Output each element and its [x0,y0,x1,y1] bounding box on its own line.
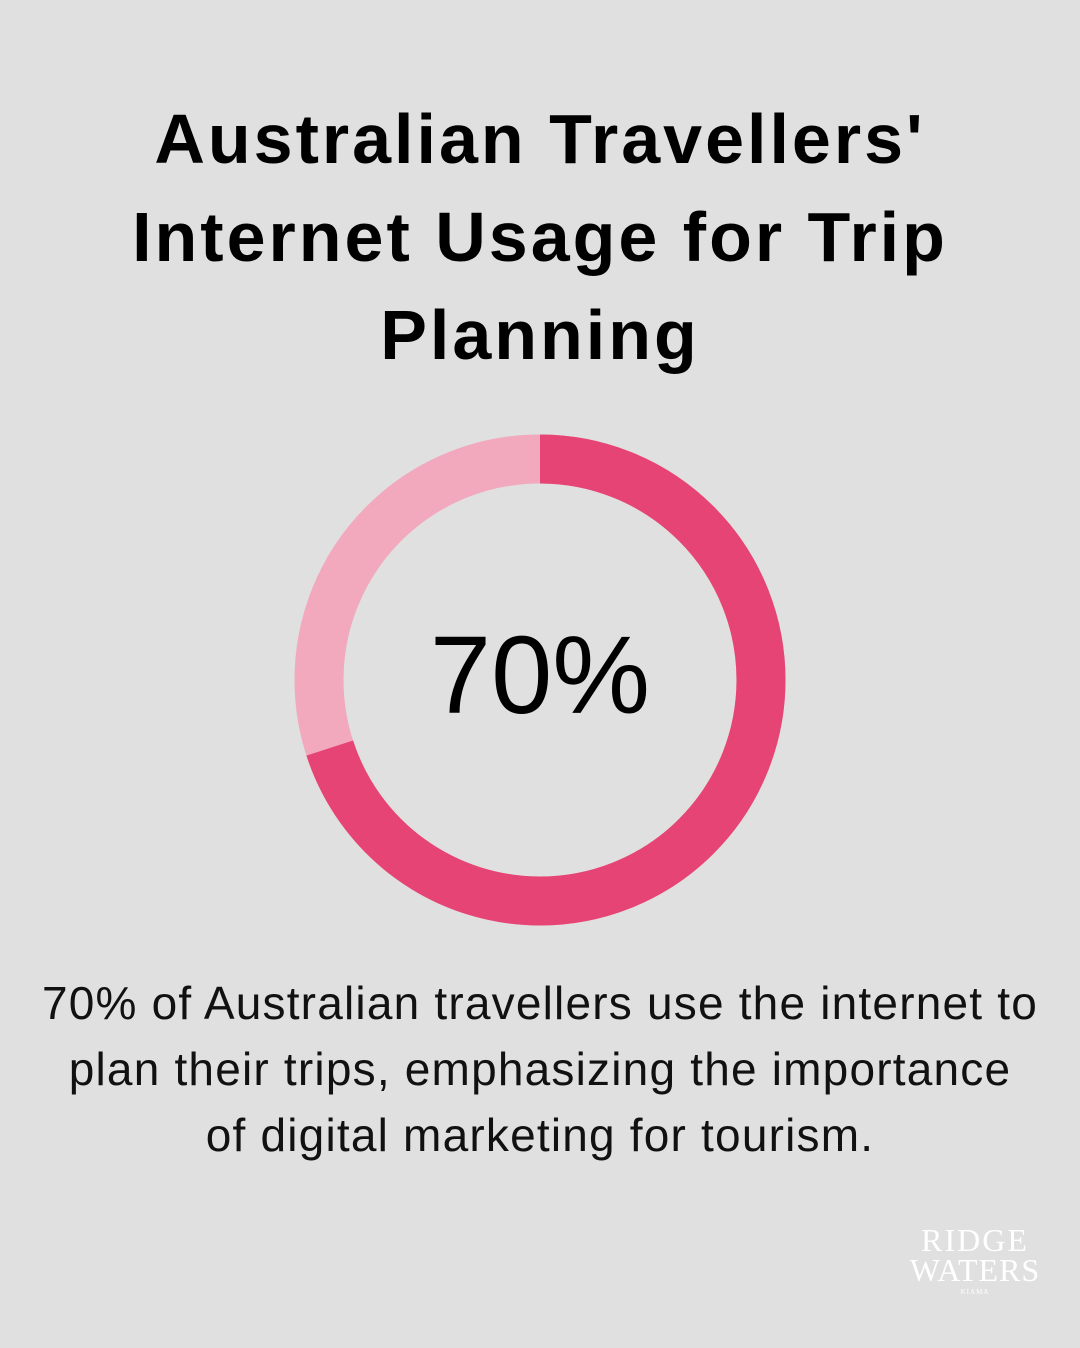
title: Planning [380,296,700,374]
donut chart: 70% [430,614,650,737]
body text: plan their trips, emphasizing the importance [69,1043,1011,1095]
title: Australian Travellers' [154,100,926,178]
logo: KIAMA [961,1288,989,1296]
title [132,100,948,374]
logo: RIDGE [921,1222,1029,1258]
logo: WATERS [910,1252,1040,1288]
body text: 70% of Australian travellers use the internet to [42,977,1038,1029]
title: Internet Usage for Trip [132,198,948,276]
logo [910,1222,1040,1296]
body text [42,977,1038,1161]
body text: of digital marketing for tourism. [206,1109,874,1161]
